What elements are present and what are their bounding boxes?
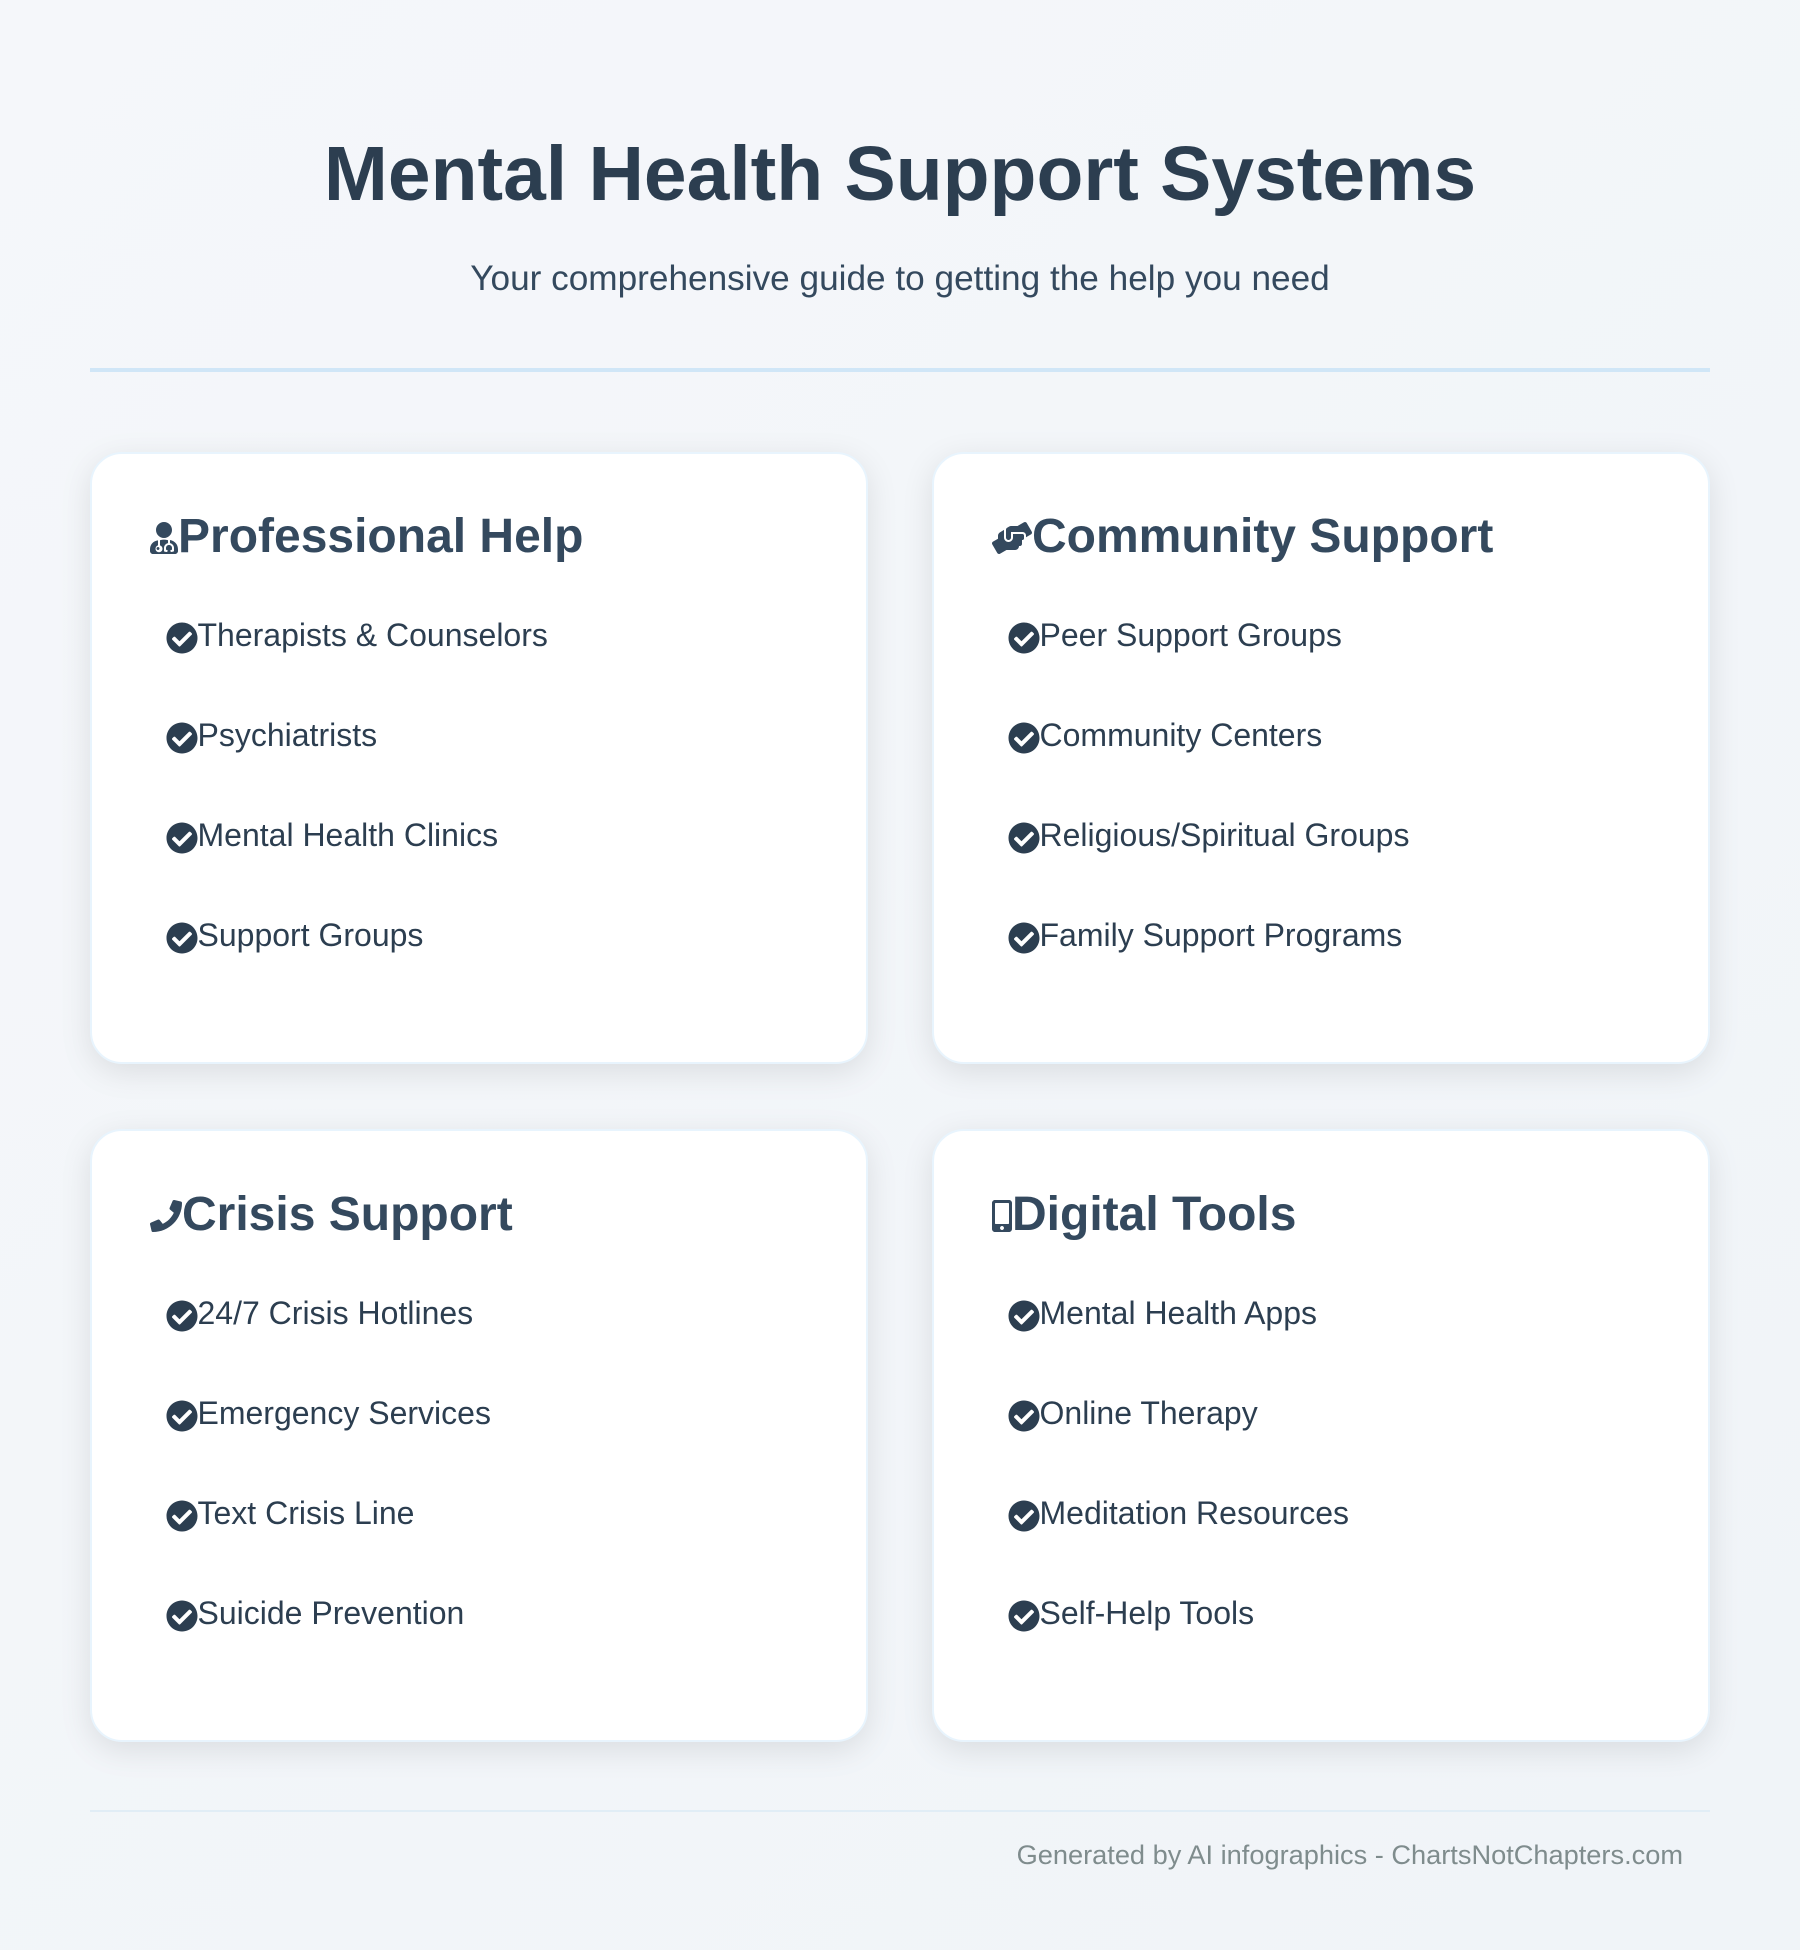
list item: Mental Health Apps [1040, 1295, 1317, 1331]
panel: professional help [90, 452, 868, 1064]
list item: Support Groups [198, 917, 423, 953]
panel: professional help: Professional Help [178, 510, 583, 563]
list item: Meditation Resources [1040, 1495, 1349, 1531]
list item: Psychiatrists [198, 717, 377, 753]
subtitle: Your comprehensive guide to getting the help you need [470, 259, 1330, 298]
panel: digital tools [932, 1129, 1710, 1742]
list item: Peer Support Groups [1040, 617, 1342, 653]
panel: crisis support [90, 1129, 868, 1742]
list item: Religious/Spiritual Groups [1040, 817, 1409, 853]
panel: crisis support: Crisis Support [182, 1188, 513, 1241]
list item: Community Centers [1040, 717, 1322, 753]
heading: community support [992, 510, 1493, 563]
list item: Text Crisis Line [198, 1495, 414, 1531]
panel: community support: Community Support [1032, 510, 1493, 563]
list item: 24/7 Crisis Hotlines [198, 1295, 473, 1331]
heading: crisis support [150, 1188, 513, 1241]
list item: Mental Health Clinics [198, 817, 498, 853]
heading: professional help [150, 510, 583, 563]
list item: Emergency Services [198, 1395, 491, 1431]
panel: digital tools: Digital Tools [1012, 1188, 1296, 1241]
list item: Family Support Programs [1040, 917, 1402, 953]
list item: Online Therapy [1040, 1395, 1258, 1431]
panel: community support [932, 452, 1710, 1064]
list item: Self-Help Tools [1040, 1595, 1254, 1631]
list item: Suicide Prevention [198, 1595, 464, 1631]
heading: digital tools [992, 1188, 1296, 1241]
title: Mental Health Support Systems [324, 131, 1476, 217]
list item: Therapists & Counselors [198, 617, 548, 653]
footer credit: Generated by AI infographics - ChartsNotChapters.com [1017, 1839, 1683, 1870]
